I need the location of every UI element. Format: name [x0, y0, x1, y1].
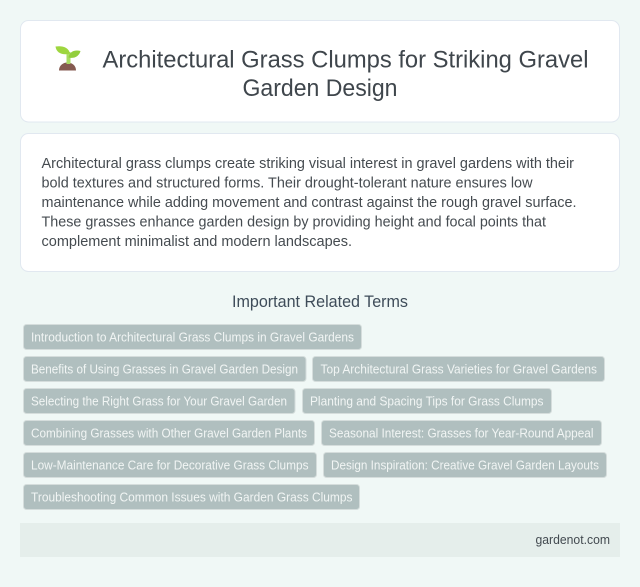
chip: Top Architectural Grass Varieties for Gravel Gardens	[320, 362, 597, 376]
chip	[24, 324, 362, 350]
chip: Combining Grasses with Other Gravel Garden Plants	[31, 426, 307, 440]
chip	[24, 356, 306, 382]
footer	[20, 523, 620, 557]
chip	[24, 452, 316, 478]
icon: sprout	[56, 46, 80, 70]
description text: Architectural grass clumps create striking visual interest in gravel gardens with their	[42, 156, 574, 172]
description text: bold textures and structured forms. Their drought-tolerant nature ensures low	[42, 175, 533, 191]
chip: Selecting the Right Grass for Your Gravel Garden	[31, 394, 287, 408]
chip	[312, 356, 604, 382]
title text: Architectural Grass Clumps for Striking Gravel	[102, 46, 588, 74]
chip	[302, 388, 552, 414]
chip: Planting and Spacing Tips for Grass Clumps	[310, 394, 544, 408]
chip: Troubleshooting Common Issues with Garden Grass Clumps	[31, 490, 352, 504]
chip: Seasonal Interest: Grasses for Year-Round Appeal	[329, 426, 594, 440]
chip: Low-Maintenance Care for Decorative Grass Clumps	[31, 458, 308, 472]
description text	[42, 156, 576, 250]
panel: description card	[20, 134, 620, 272]
chip	[24, 484, 360, 510]
heading: important related terms: Important Related Terms	[232, 293, 408, 311]
title text	[102, 46, 588, 102]
chip	[24, 420, 314, 446]
title text: Garden Design	[242, 75, 398, 102]
description text: complement minimalist and modern landscapes.	[42, 234, 352, 250]
chip	[324, 452, 606, 478]
chip: Design Inspiration: Creative Gravel Garden Layouts	[331, 458, 599, 472]
footer text: source: gardenot.com	[536, 532, 610, 547]
panel: title card	[20, 20, 620, 122]
chip	[24, 388, 295, 414]
chip	[322, 420, 602, 446]
description text: maintenance while adding movement and contrast against the rough gravel surface.	[42, 195, 576, 211]
chip: Introduction to Architectural Grass Clumps in Gravel Gardens	[31, 330, 354, 344]
panel: related term chips	[24, 324, 606, 510]
description text: These grasses enhance garden design by providing height and focal points that	[42, 214, 546, 230]
chip: Benefits of Using Grasses in Gravel Garden Design	[31, 362, 298, 376]
